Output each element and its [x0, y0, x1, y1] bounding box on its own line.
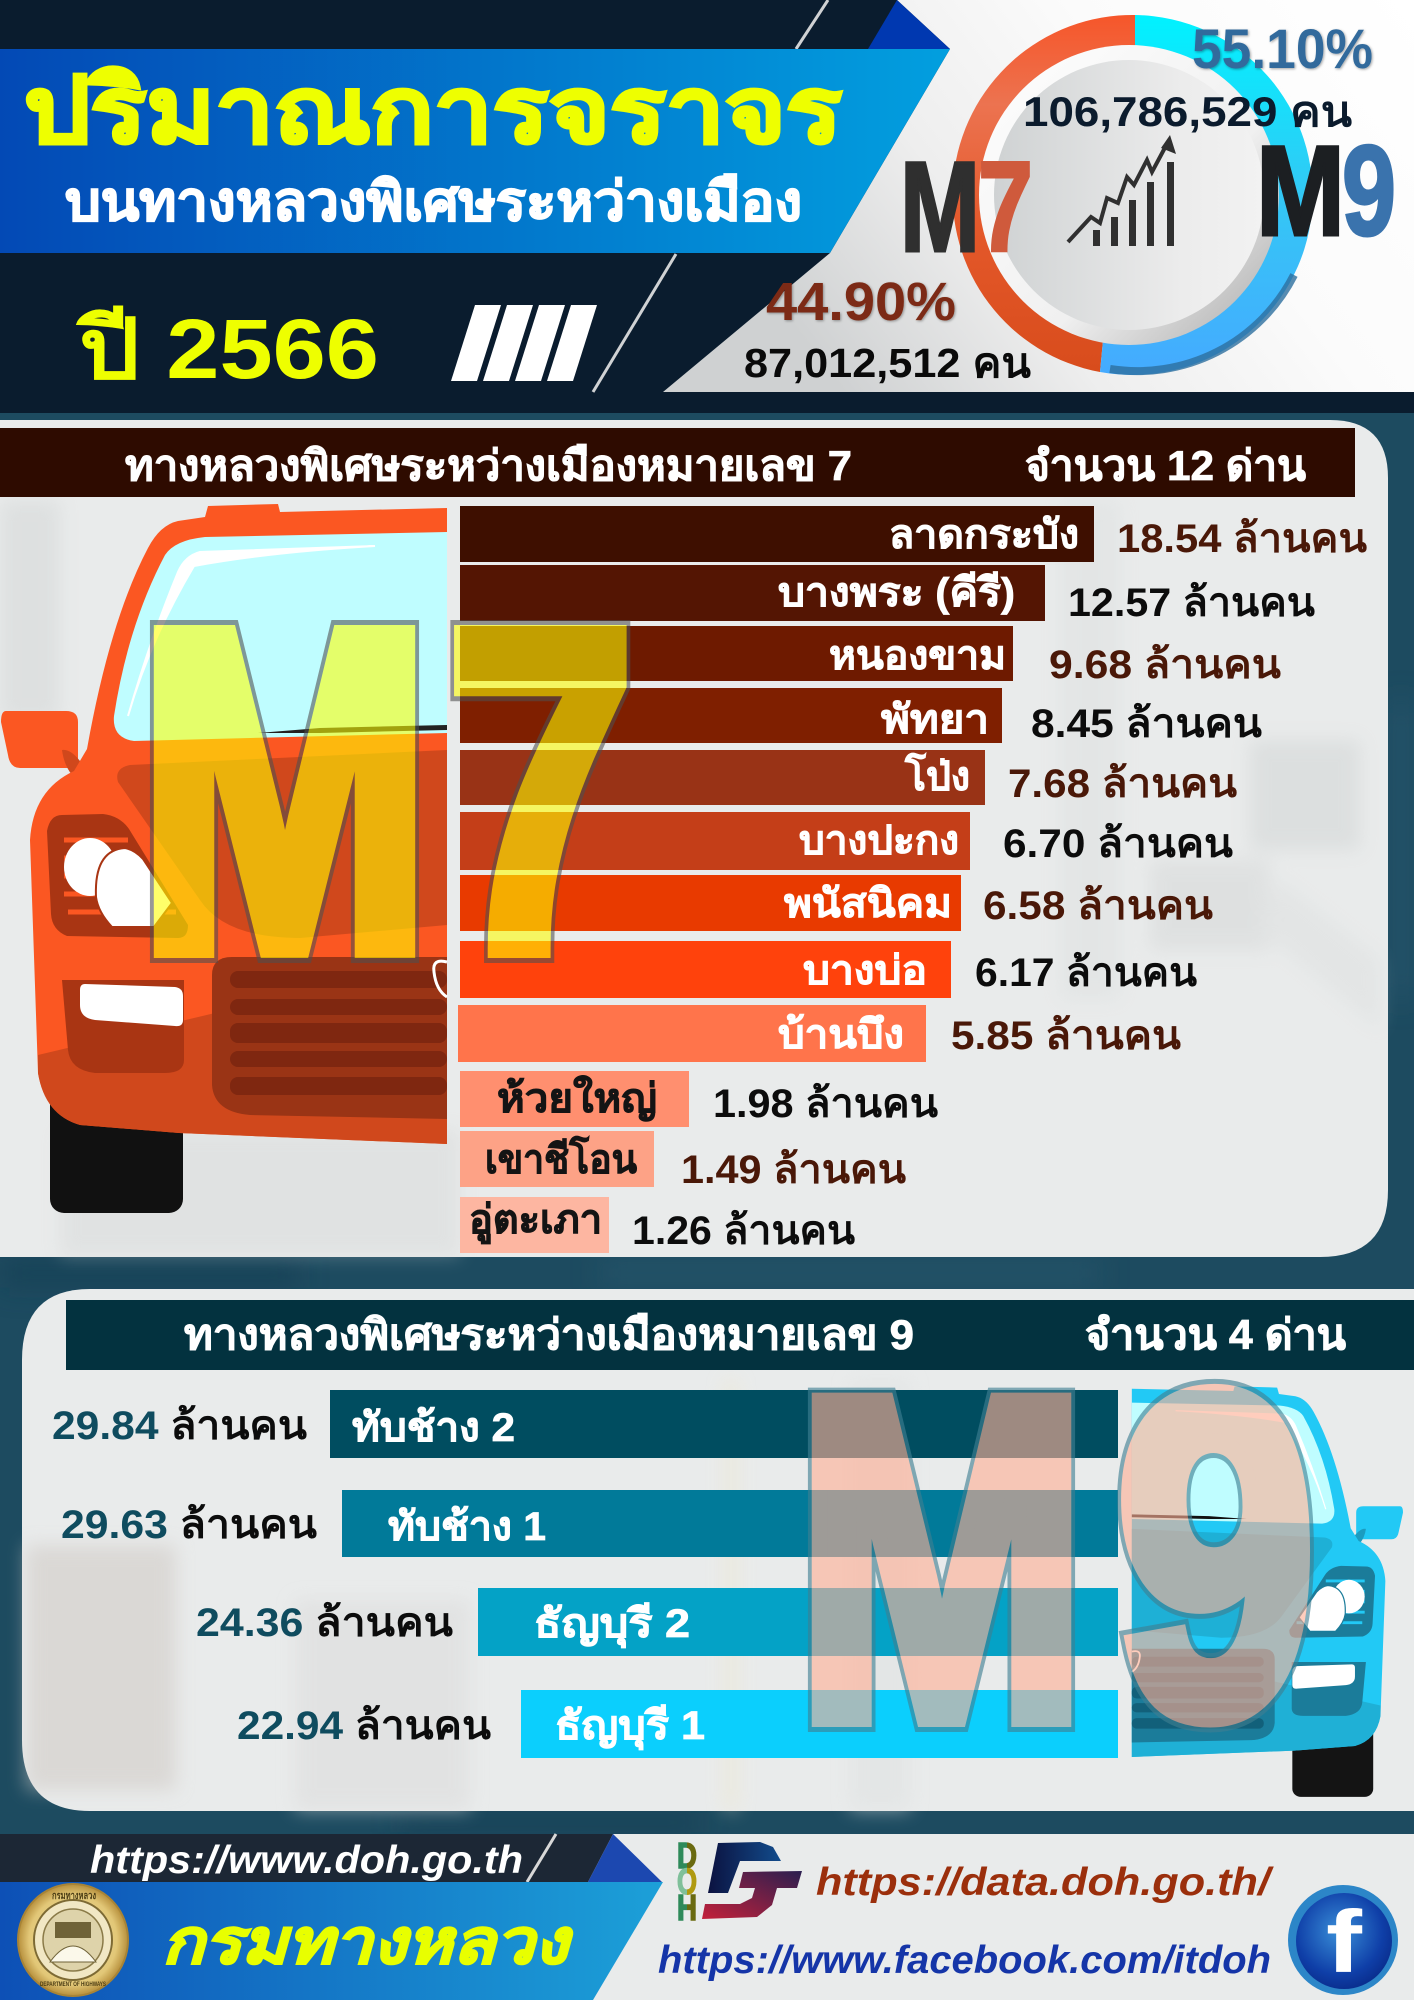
- panel header: M7: [0, 428, 1355, 497]
- bar labels: M7: เขาชีโอน: [485, 1136, 637, 1182]
- ring rim: [979, 45, 1279, 345]
- header: light diagonal area behind ring: [663, 0, 1414, 392]
- logo: DOH mark: H: [677, 1887, 697, 1928]
- bar labels: M7: หนองขาม: [829, 634, 1006, 678]
- mirror arm: [1352, 1529, 1366, 1543]
- decorative stripes: [451, 305, 597, 381]
- bar values: M7: [632, 517, 1367, 1253]
- logo: DOH mark: O: [677, 1861, 697, 1902]
- lower body shade: [1132, 1653, 1380, 1757]
- blue triangle: [588, 1834, 662, 1882]
- stat: M9 percent: 55.10%: [1192, 17, 1373, 80]
- bar labels: M7: พัทยา: [881, 698, 989, 742]
- bar values: M7: 5.85 ล้านคน: [951, 1014, 1181, 1058]
- bar labels: M7: ลาดกระบัง: [889, 513, 1079, 557]
- bar values: M7: 1.26 ล้านคน: [632, 1209, 855, 1253]
- body: [30, 504, 447, 1144]
- panel header: M9: [66, 1300, 1414, 1370]
- footer: blue banner: [0, 1882, 663, 2000]
- grille: [212, 957, 447, 1119]
- icon: department seal: DEPARTMENT OF HIGHWAYS: [40, 1982, 106, 1988]
- icon: rising chart: [1068, 135, 1176, 246]
- fog lamp housing: [1292, 1662, 1366, 1716]
- windshield glare: [1176, 1411, 1326, 1509]
- grille: [1132, 1649, 1275, 1743]
- wheel: [50, 1085, 183, 1213]
- subtitle: บนทางหลวงพิเศษระหว่างเมือง: [65, 172, 802, 232]
- website url: https://www.doh.go.th: [90, 1839, 523, 1882]
- illustration: blue car: [1132, 1386, 1403, 1797]
- label: M7: 7: [978, 136, 1033, 279]
- title banner: [0, 49, 950, 253]
- bar labels: M9: ธัญบุรี 1: [555, 1704, 705, 1751]
- wheel: [1292, 1723, 1373, 1797]
- wipers: [258, 725, 447, 733]
- bar values: M7: 6.70 ล้านคน: [1003, 822, 1233, 866]
- headlight louvres: [1297, 1581, 1365, 1623]
- stat: M9 travellers: 106,786,529 คน: [1023, 88, 1352, 135]
- mirror: [1356, 1506, 1403, 1539]
- bar values: M7: 6.58 ล้านคน: [983, 884, 1213, 928]
- headlight louvres: [64, 840, 176, 912]
- mirror arm: [62, 750, 85, 775]
- panel: M9: [22, 1289, 1414, 1811]
- bar labels: M7: พนัสนิคม: [784, 882, 952, 926]
- big label: M9 overlay: 9: [1116, 1299, 1316, 1810]
- label: M9: M: [1256, 120, 1345, 263]
- illustration: orange car: [1, 504, 447, 1213]
- panel: M7: [0, 420, 1388, 1257]
- bar labels: M7: โป่ง: [904, 753, 970, 799]
- grille slats: [230, 971, 447, 1095]
- donut chart: M7 vs M9 share: [953, 15, 1313, 375]
- windshield glare: [128, 546, 375, 716]
- windshield: [1132, 1403, 1334, 1524]
- headlight housing: [47, 814, 188, 938]
- bar labels: M7: อู่ตะเภา: [469, 1198, 602, 1244]
- bar values: M7: 6.17 ล้านคน: [975, 951, 1197, 995]
- bar values: M9: 29.84 ล้านคน: [52, 1404, 307, 1448]
- bar labels: M7: บางปะกง: [799, 819, 959, 863]
- footer: dark url bar: [0, 1834, 662, 1882]
- ring: M7 segment 44.90%: [953, 15, 1135, 372]
- headlight housing: [1289, 1566, 1375, 1638]
- header: blue triangle: [868, 0, 950, 49]
- big label: M9 overlay: M: [796, 1303, 1087, 1814]
- icon: facebook: f: [1326, 1892, 1363, 1991]
- big label: M7 overlay: M: [138, 537, 431, 1045]
- bar labels: M9: ทับช้าง 1: [388, 1505, 546, 1549]
- ring inner disc: [994, 60, 1264, 330]
- ring shaded edge: [1110, 275, 1294, 371]
- bar values: M9: 24.36 ล้านคน: [196, 1601, 453, 1645]
- bar labels: M7: บางพระ (คีรี): [778, 571, 1015, 615]
- M9 heading: ทางหลวงพิเศษระหว่างเมืองหมายเลข 9: [184, 1311, 914, 1358]
- big label: M7 overlay: 7: [447, 537, 634, 1045]
- slash: [527, 1834, 556, 1882]
- facebook url: https://www.facebook.com/itdoh: [658, 1939, 1271, 1982]
- footer: light background: [0, 1834, 1414, 2000]
- label: M9: 9: [1342, 120, 1396, 263]
- mirror: [1, 711, 78, 768]
- badge: [434, 961, 447, 997]
- big label: M9 overlay: 9: [1116, 1299, 1316, 1810]
- icon: department seal: กรมทางหลวง: [52, 1891, 96, 1902]
- bar labels: M7: บางบ่อ: [803, 949, 927, 993]
- M7 toll plaza count: จำนวน 12 ด่าน: [1025, 442, 1306, 489]
- bar values: M7: 12.57 ล้านคน: [1068, 581, 1315, 625]
- icon: facebook: [1288, 1885, 1398, 1995]
- year label: ปี 2566: [76, 302, 379, 396]
- header: thin diagonal lines: [593, 0, 828, 392]
- hood shade: [1132, 1529, 1332, 1638]
- title: ปริมาณการจราจร: [24, 60, 842, 162]
- grille slats: [1132, 1657, 1264, 1729]
- big label: M7 overlay: 7: [447, 537, 634, 1045]
- department name: กรมทางหลวง: [162, 1908, 573, 1977]
- M9 toll plaza count: จำนวน 4 ด่าน: [1085, 1311, 1346, 1358]
- lower body shade: [38, 965, 447, 1144]
- bar chart: M9 plazas: [330, 1390, 1118, 1758]
- logo: DOH mark: D: [677, 1835, 697, 1876]
- bar labels: M9: [352, 1406, 705, 1751]
- bar labels: M7: ห้วยใหญ่: [497, 1075, 657, 1122]
- bar labels: M7: [469, 513, 1079, 1244]
- M7 heading: ทางหลวงพิเศษระหว่างเมืองหมายเลข 7: [125, 442, 852, 489]
- bar values: M9: 22.94 ล้านคน: [237, 1704, 491, 1748]
- fog lamp: [80, 984, 183, 1026]
- headlight lamps: [1299, 1580, 1365, 1631]
- bar values: M7: 1.98 ล้านคน: [713, 1082, 938, 1126]
- data portal url: https://data.doh.go.th/: [816, 1861, 1275, 1904]
- badge: [1132, 1651, 1140, 1672]
- bar values: M7: 1.49 ล้านคน: [681, 1148, 906, 1192]
- bar values: M7: 9.68 ล้านคน: [1049, 643, 1281, 687]
- bar values: M7: 7.68 ล้านคน: [1008, 762, 1237, 806]
- bar chart: M7 plazas: [458, 506, 1094, 1253]
- bar values: M9: 29.63 ล้านคน: [61, 1503, 317, 1547]
- wipers: [1132, 1514, 1247, 1519]
- ring: M9 segment 55.10%: [1100, 15, 1313, 375]
- windshield: [114, 532, 447, 741]
- icon: department seal: [18, 1884, 128, 1996]
- logo: DOH mark: [677, 1835, 802, 1928]
- faint road photo: [0, 500, 1380, 1257]
- fog lamp housing: [62, 980, 184, 1073]
- bar values: M9: [52, 1404, 491, 1748]
- hood shade: [117, 750, 447, 938]
- bar labels: M9: ทับช้าง 2: [352, 1406, 515, 1450]
- big label: M9 overlay: M: [796, 1303, 1087, 1814]
- bar values: M7: 18.54 ล้านคน: [1117, 517, 1367, 561]
- bar labels: M9: ธัญบุรี 2: [534, 1602, 690, 1649]
- stat: M7 travellers: 87,012,512 คน: [744, 340, 1031, 386]
- headlight lamps: [64, 838, 172, 927]
- faint road photo: [26, 1380, 910, 1810]
- bar values: M7: 8.45 ล้านคน: [1031, 702, 1262, 746]
- fog lamp: [1292, 1664, 1355, 1689]
- header: dark navy block: [0, 0, 1414, 413]
- big label: M7 overlay: M: [138, 537, 431, 1045]
- label: M7: M: [900, 136, 980, 279]
- stat: M7 percent: 44.90%: [766, 272, 956, 332]
- bar labels: M7: บ้านบึง: [778, 1013, 904, 1057]
- body: [1132, 1386, 1385, 1757]
